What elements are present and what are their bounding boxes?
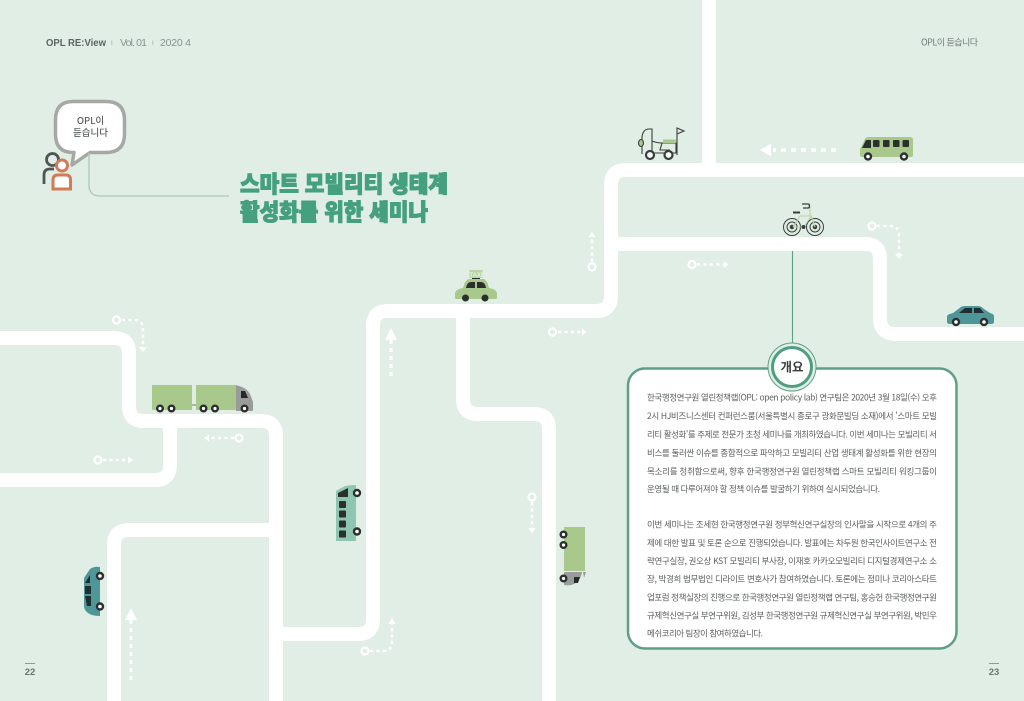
title connector line — [89, 153, 229, 196]
text block: first paragraph: 2시 HJ비즈니스센터 컨퍼런스룸(서울특별시 종로구 광화문빌딩 소재)에서 '스마트 모빌 — [647, 410, 937, 422]
text block: second paragraph: 제에 대한 발표 및 토론 순으로 진행되었습니다. 발표에는 차두원 한국인사이트연구소 전 — [647, 537, 937, 549]
text block: second paragraph: 략연구실장, 권오상 KST 모빌리티 부사장, 이재호 카카오모빌리티 디지털경제연구소 소 — [647, 555, 937, 567]
arrow: top road leftward — [760, 144, 836, 156]
page number: right: 23 — [989, 667, 999, 678]
speech bubble — [56, 102, 124, 165]
arrow: under bike rightward — [688, 261, 728, 268]
arrow: downward by lower road — [528, 494, 536, 533]
icon: green bus — [860, 137, 913, 160]
header: publication info: Vol. 01 — [120, 37, 147, 49]
title: 스마트 모빌리티 생태계 — [240, 165, 448, 199]
text block: first paragraph: 운영될 때 다루어져야 할 정책 이슈를 발굴하기 위하여 실시되었습니다. — [647, 483, 880, 495]
text block: first paragraph: 한국행정연구원 열린정책랩(OPL: open policy lab) 연구팀은 2020년 3월 18일(수) 오후 — [647, 392, 937, 404]
icon: golf cart with flag — [638, 128, 684, 159]
text block: second paragraph: 장, 박경희 법무법인 디라이트 변호사가 참여하였습니다. 토론에는 정미나 코리아스타트 — [647, 573, 937, 585]
text block: first paragraph: 목소리를 청취함으로써, 향후 한국행정연구원 열린정책랩 스마트 모빌리티 워킹그룹이 — [647, 466, 937, 478]
icon: bicycle — [784, 204, 824, 236]
icon: cargo truck — [152, 385, 253, 411]
arrow: bottom curve up — [362, 618, 396, 654]
icon: vertical delivery truck — [561, 527, 586, 585]
arrow: upward near junction — [588, 232, 596, 270]
page number: left: 22 — [25, 667, 35, 678]
header: publication info: I — [111, 41, 113, 47]
badge: overview: 개요 — [780, 356, 804, 376]
arrow: left curve down — [113, 316, 147, 352]
text block: first paragraph: 리티 활성화'를 주제로 전문가 초청 세미나를 개최하였습니다. 이번 세미나는 모빌리티 서 — [647, 428, 937, 440]
icon: speech bubble with people — [44, 102, 124, 189]
text block: first paragraph: 비스를 둘러싼 이슈를 종합적으로 파악하고 모빌리티 산업 생태계 활성화를 위한 현장의 — [647, 447, 937, 459]
text block: second paragraph: 규제혁신연구실 부연구위원, 김성부 한국행정연구원 규제혁신연구실 부연구위원, 박민우 — [647, 610, 937, 622]
arrow: large upward lower-left — [125, 608, 137, 680]
arrow: leftward under truck — [204, 434, 242, 442]
arrow: rightward at left — [94, 456, 133, 464]
header: publication info: 2020 4 — [160, 37, 191, 49]
text block: second paragraph: 업포럼 정책실장의 진행으로 한국행정연구원 열린정책랩 연구팀, 홍승헌 한국행정연구원 — [647, 592, 937, 604]
speech bubble: 듣습니다 — [73, 125, 108, 139]
text block: second paragraph: 이번 세미나는 조세현 한국행정연구원 정부혁신연구실장의 인사말을 시작으로 4개의 주 — [647, 518, 937, 530]
icon: vertical teal bus — [336, 485, 360, 541]
arrow: large upward — [385, 328, 397, 376]
icon: gray person — [44, 154, 58, 184]
panel: summary — [628, 343, 956, 648]
text block: second paragraph — [647, 518, 937, 640]
badge: overview — [768, 343, 816, 391]
header: section name: OPL이 듣습니다 — [921, 36, 979, 48]
icon: taxi — [455, 270, 497, 302]
icon: teal car — [947, 306, 994, 325]
icon: taxi: TAXI — [469, 273, 483, 279]
header: publication info — [46, 37, 191, 49]
title — [240, 165, 448, 227]
connector line to summary panel — [792, 251, 794, 345]
text block: first paragraph — [647, 392, 937, 495]
text block: second paragraph: 메쉬코리아 팀장이 참여하였습니다. — [647, 628, 763, 640]
arrow: right of center road — [549, 328, 586, 336]
title: 활성화를 위한 세미나 — [240, 193, 428, 227]
header: publication info: OPL RE:View — [46, 37, 107, 49]
speech bubble: OPL이 — [77, 113, 104, 127]
icon: vertical teal van — [84, 567, 103, 616]
arrow: right curve down — [868, 222, 903, 259]
header: publication info: I — [152, 41, 154, 47]
icon: orange person — [53, 160, 70, 189]
